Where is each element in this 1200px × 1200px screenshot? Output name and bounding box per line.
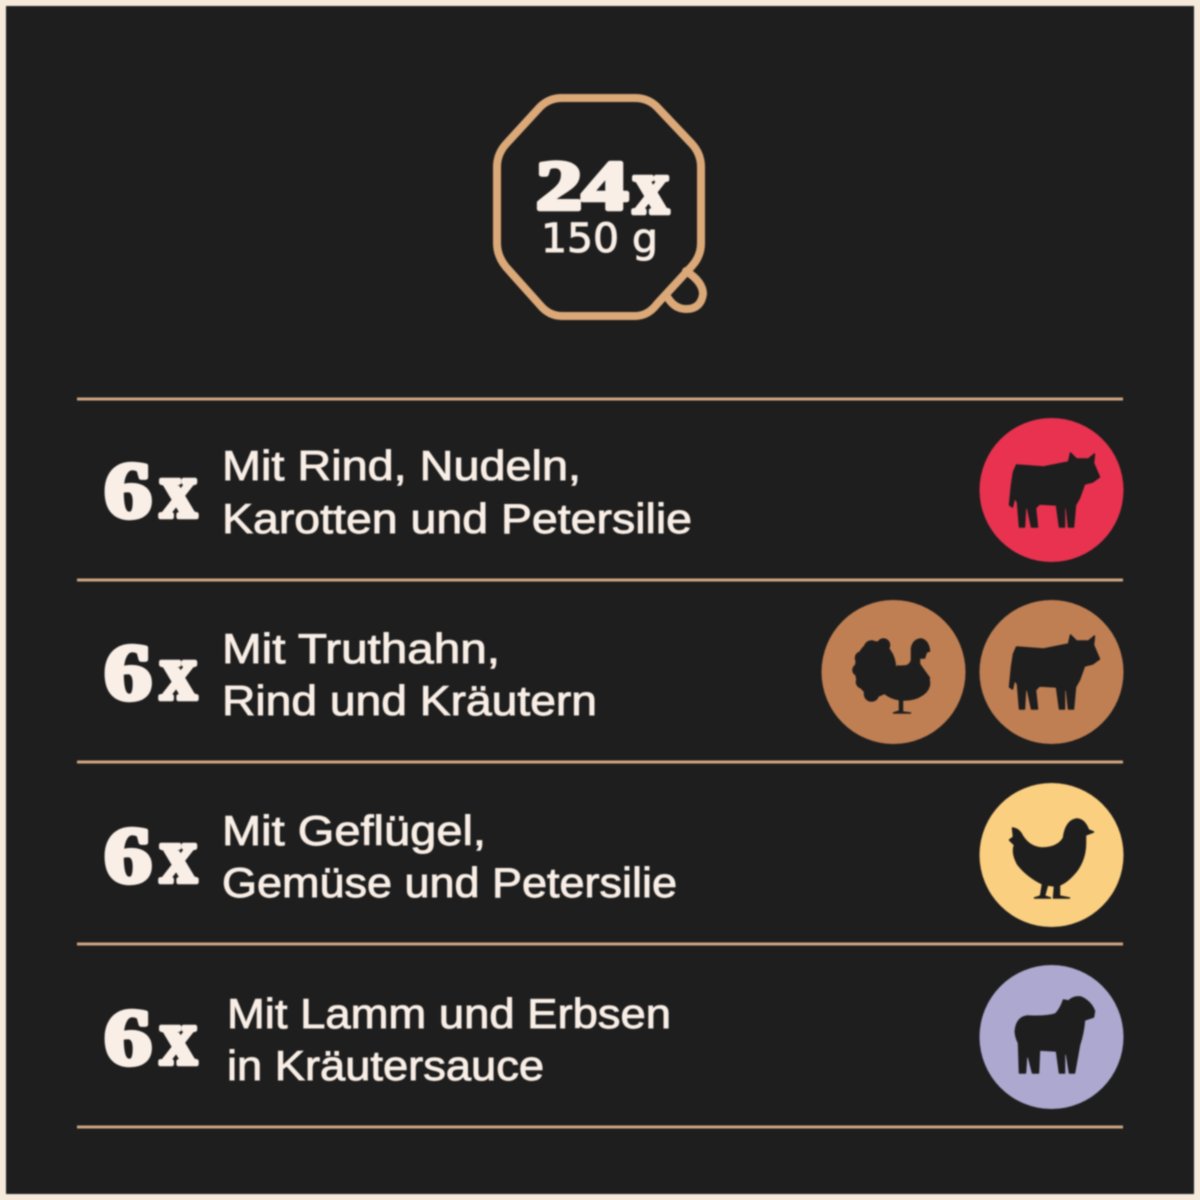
icon: chicken on yellow circle	[980, 783, 1124, 927]
description: Mit Truthahn,	[222, 625, 500, 672]
description	[227, 990, 671, 1089]
tray outline icon	[497, 98, 703, 316]
quantity 6x: x	[160, 629, 197, 717]
row 2: turkey and beef	[104, 600, 1124, 744]
icon: turkey on brown circle	[822, 600, 966, 744]
description: in Kräutersauce	[227, 1042, 544, 1089]
quantity 6x: x	[160, 994, 197, 1082]
quantity 6x: x	[160, 812, 197, 900]
description: Rind und Kräutern	[222, 677, 597, 724]
tray badge: 24x 150 g	[497, 98, 703, 316]
description	[222, 442, 692, 542]
icon: cow on brown circle	[980, 600, 1124, 744]
quantity 6x	[104, 629, 197, 717]
divider lines	[77, 399, 1123, 1127]
count: 24x: x	[633, 143, 669, 230]
row 1: beef	[104, 418, 1124, 562]
quantity 6x	[104, 994, 197, 1082]
quantity 6x: 6	[104, 447, 152, 535]
quantity 6x: 6	[104, 812, 152, 900]
icon: sheep on purple circle	[980, 965, 1124, 1109]
quantity 6x: 6	[104, 629, 152, 717]
weight: 150 g: 150 g	[541, 216, 658, 262]
description: Gemüse und Petersilie	[222, 859, 677, 906]
icon: cow on red circle	[980, 418, 1124, 562]
row 3: poultry	[104, 783, 1124, 927]
row 4: lamb	[104, 965, 1124, 1109]
quantity 6x: 6	[104, 994, 152, 1082]
count: 24x: 24	[536, 148, 628, 225]
description: Mit Rind, Nudeln,	[222, 442, 581, 489]
description: Mit Lamm und Erbsen	[227, 990, 671, 1037]
description: Mit Geflügel,	[222, 807, 486, 854]
quantity 6x: x	[160, 447, 197, 535]
quantity 6x	[104, 812, 197, 900]
description	[222, 625, 597, 724]
count: 24x	[536, 143, 669, 230]
description	[222, 807, 677, 906]
quantity 6x	[104, 447, 197, 535]
description: Karotten und Petersilie	[222, 495, 692, 542]
